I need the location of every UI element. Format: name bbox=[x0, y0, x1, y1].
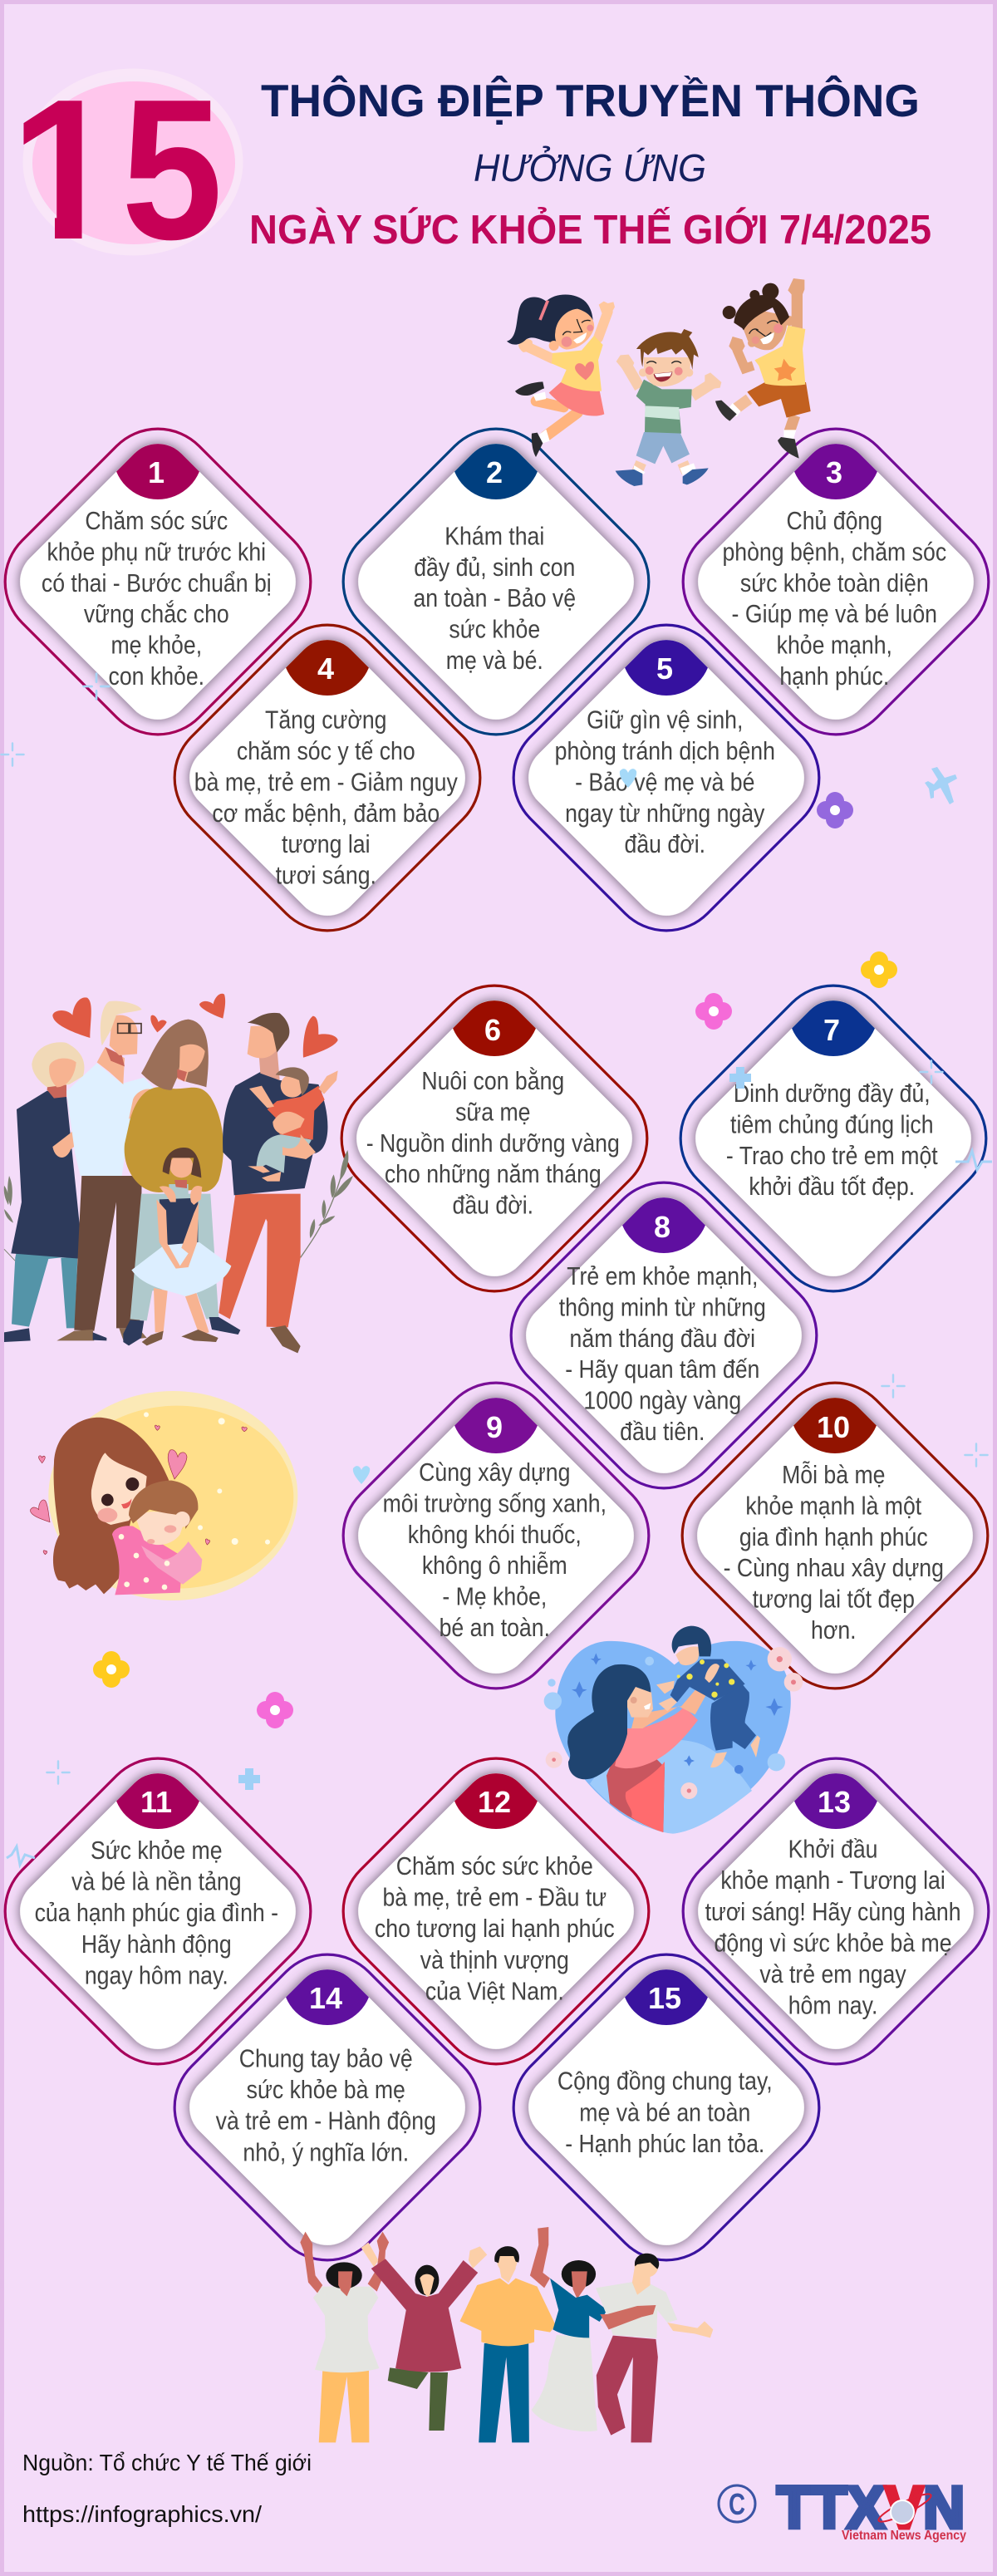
card 6 bbox=[341, 984, 648, 1293]
copyright mark: C bbox=[729, 2487, 745, 2521]
logo: TTXVN: TTXVN bbox=[777, 2475, 965, 2541]
badge 1: 1 bbox=[148, 455, 165, 489]
message 6: sữa mẹ bbox=[455, 1099, 531, 1127]
card 13 bbox=[681, 1757, 990, 2066]
badge 3: 3 bbox=[826, 455, 842, 489]
boy bbox=[616, 329, 721, 486]
badge 4: 4 bbox=[317, 651, 334, 686]
card 8 bbox=[510, 1182, 818, 1489]
message 10: gia đình hạnh phúc bbox=[739, 1523, 928, 1551]
badge 7: 7 bbox=[823, 1013, 840, 1047]
badge 2 bbox=[454, 444, 538, 499]
flowers bbox=[546, 1647, 803, 1799]
message 15: mẹ và bé an toàn bbox=[579, 2098, 750, 2127]
message 15: Cộng đồng chung tay, bbox=[557, 2067, 773, 2096]
card 10 bbox=[681, 1381, 989, 1690]
message 12: cho tương lai hạnh phúc bbox=[375, 1915, 615, 1944]
badge 5: 5 bbox=[656, 651, 673, 686]
message 2: mẹ và bé. bbox=[446, 646, 543, 676]
card 4 bbox=[173, 623, 482, 932]
card 9 bbox=[342, 1381, 650, 1690]
message 8: năm tháng đầu đời bbox=[570, 1325, 755, 1353]
hearts bbox=[52, 994, 338, 1058]
badge 15 bbox=[625, 1969, 708, 2025]
illustration: family of six bbox=[4, 994, 353, 1353]
message 3: phòng bệnh, chăm sóc bbox=[722, 538, 946, 567]
illustration: mother lifting child on blue heart bbox=[544, 1626, 803, 1834]
message 1: vững chắc cho bbox=[84, 599, 229, 629]
blue heart bbox=[555, 1641, 791, 1834]
card 5 bbox=[512, 623, 821, 932]
message 12: của Việt Nam. bbox=[425, 1978, 564, 2006]
message 11: và bé là nền tảng bbox=[71, 1868, 242, 1896]
message 3: sức khỏe toàn diện bbox=[740, 569, 929, 597]
icon: pulse lines bbox=[7, 1151, 992, 1865]
message 7: tiêm chủng đúng lịch bbox=[730, 1111, 934, 1139]
badge 9: 9 bbox=[486, 1410, 503, 1444]
message 9: bé an toàn. bbox=[440, 1614, 550, 1643]
message 6: cho những năm tháng bbox=[385, 1160, 602, 1189]
message 11: Hãy hành động bbox=[81, 1930, 232, 1959]
message 6: đầu đời. bbox=[453, 1192, 533, 1220]
message 9: môi trường sống xanh, bbox=[383, 1490, 607, 1518]
message 14: sức khỏe bà mẹ bbox=[247, 2076, 405, 2105]
message 10: - Cùng nhau xây dựng bbox=[724, 1554, 944, 1583]
message 4: Tăng cường bbox=[265, 706, 387, 735]
big number 15: 1 bbox=[10, 58, 121, 282]
message 2: sức khỏe bbox=[449, 616, 540, 644]
message 5: đầu đời. bbox=[625, 830, 705, 859]
father bbox=[219, 1194, 301, 1327]
decorative flowers and sparkles bbox=[1, 674, 992, 1865]
mother bbox=[130, 1194, 219, 1320]
badge 12 bbox=[454, 1773, 538, 1829]
message 9: không khói thuốc, bbox=[408, 1521, 582, 1549]
badge 6 bbox=[453, 1000, 536, 1056]
badge 8: 8 bbox=[654, 1210, 670, 1244]
source note: Nguồn: Tổ chức Y tế Thế giới bbox=[22, 2450, 312, 2475]
mother bbox=[607, 1728, 665, 1832]
message 1: có thai - Bước chuẩn bị bbox=[42, 569, 272, 597]
icon: airplane bbox=[925, 767, 957, 804]
leaves left and right bbox=[4, 1150, 353, 1261]
message 5: - Bảo vệ mẹ và bé bbox=[575, 769, 754, 797]
message 14: Chung tay bảo vệ bbox=[239, 2045, 413, 2073]
icon: pink flower lower bbox=[257, 1692, 293, 1728]
message 1: con khỏe. bbox=[108, 662, 204, 691]
card 3 bbox=[681, 427, 990, 736]
woman in blue and white skirt bbox=[530, 2227, 607, 2431]
card 11 bbox=[3, 1757, 312, 2066]
badge 5 bbox=[625, 640, 708, 696]
message 2: Khám thai bbox=[444, 523, 544, 551]
message 8: đầu tiên. bbox=[620, 1418, 705, 1447]
icon: small hearts bbox=[353, 769, 636, 1484]
badge 11: 11 bbox=[140, 1785, 172, 1819]
icon: pink flower bbox=[695, 993, 732, 1030]
card 2 bbox=[342, 427, 650, 736]
message 9: - Mẹ khỏe, bbox=[442, 1583, 547, 1611]
badge 6: 6 bbox=[484, 1013, 501, 1047]
message 2: đầy đủ, sinh con bbox=[414, 553, 575, 582]
card 15 bbox=[512, 1953, 821, 2262]
badge 4 bbox=[286, 640, 369, 696]
message 4: cơ mắc bệnh, đảm bảo bbox=[212, 799, 440, 828]
card 1 bbox=[3, 427, 312, 736]
badge 11 bbox=[116, 1773, 199, 1829]
message 2: an toàn - Bảo vệ bbox=[413, 584, 576, 613]
badge 12: 12 bbox=[478, 1785, 511, 1819]
message 15: - Hạnh phúc lan tỏa. bbox=[565, 2130, 764, 2158]
badge 1 bbox=[116, 444, 199, 499]
title line 3: NGÀY SỨC KHỎE THẾ GIỚI 7/4/2025 bbox=[249, 207, 931, 253]
message 12: và thịnh vượng bbox=[420, 1946, 569, 1974]
icon: yellow flower bbox=[861, 951, 897, 988]
badge 15: 15 bbox=[648, 1981, 681, 2015]
badge 13 bbox=[794, 1773, 877, 1829]
daughter bbox=[154, 1288, 209, 1335]
message 11: Sức khỏe mẹ bbox=[91, 1836, 223, 1866]
woman in maroon bbox=[361, 2242, 487, 2431]
message 4: bà mẹ, trẻ em - Giảm nguy bbox=[194, 769, 458, 797]
message 4: chăm sóc y tế cho bbox=[237, 737, 415, 766]
illustration: three jumping children bbox=[507, 278, 811, 486]
badge 10 bbox=[793, 1398, 877, 1453]
message 1: Chăm sóc sức bbox=[85, 507, 228, 536]
grandfather bbox=[74, 1176, 142, 1331]
card 12 bbox=[342, 1757, 650, 2066]
website link: https://infographics.vn/ bbox=[22, 2501, 262, 2527]
message 8: thông minh từ những bbox=[559, 1294, 766, 1322]
message 5: ngay từ những ngày bbox=[565, 799, 765, 828]
message 11: của hạnh phúc gia đình - bbox=[35, 1899, 278, 1928]
message 8: 1000 ngày vàng bbox=[583, 1387, 741, 1415]
icon: sparkles bbox=[1, 674, 988, 1784]
small flowers and hearts bbox=[144, 1412, 270, 1545]
decorative circle behind 15 bbox=[27, 72, 239, 252]
message 13: hôm nay. bbox=[788, 1992, 877, 2020]
message 9: không ô nhiễm bbox=[422, 1551, 567, 1581]
yellow moon bbox=[48, 1391, 297, 1600]
dress dots bbox=[119, 1534, 169, 1590]
message 6: - Nguồn dinh dưỡng vàng bbox=[366, 1129, 620, 1158]
icon: purple flower bbox=[817, 792, 853, 828]
mother pink dress bbox=[112, 1526, 183, 1595]
badge 9 bbox=[454, 1398, 538, 1453]
message 13: và trẻ em ngay bbox=[759, 1960, 906, 1989]
message 3: - Giúp mẹ và bé luôn bbox=[732, 600, 937, 629]
message 3: hạnh phúc. bbox=[779, 662, 889, 691]
message 13: khỏe mạnh - Tương lai bbox=[720, 1866, 945, 1895]
badge 13: 13 bbox=[818, 1785, 851, 1819]
girl bbox=[507, 294, 615, 457]
badge 14: 14 bbox=[309, 1981, 342, 2015]
message 8: - Hãy quan tâm đến bbox=[565, 1355, 759, 1384]
icon: plus signs bbox=[238, 1067, 751, 1790]
message 1: mẹ khỏe, bbox=[111, 632, 202, 660]
card 7 bbox=[680, 984, 987, 1293]
message 10: tương lai tốt đẹp bbox=[753, 1585, 915, 1614]
baby bbox=[141, 1541, 202, 1585]
message 13: động vì sức khỏe bà mẹ bbox=[715, 1930, 952, 1958]
illustration: mother hugging baby on yellow moon bbox=[31, 1391, 297, 1600]
big number 15: 5 bbox=[121, 58, 223, 282]
badge 3 bbox=[794, 444, 877, 499]
woman in white bbox=[300, 2232, 389, 2442]
child held by father bbox=[256, 1134, 312, 1173]
message 4: tương lai bbox=[282, 830, 371, 859]
message 3: khỏe mạnh, bbox=[777, 632, 892, 660]
message 13: Khởi đầu bbox=[788, 1836, 878, 1864]
sparkles and bubbles bbox=[572, 1653, 783, 1774]
illustration: group of five friends bbox=[300, 2227, 713, 2442]
title line 1: THÔNG ĐIỆP TRUYỀN THÔNG bbox=[261, 75, 920, 126]
card 14 bbox=[173, 1953, 482, 2262]
message 1: khỏe phụ nữ trước khi bbox=[47, 538, 266, 567]
message 10: khỏe mạnh là một bbox=[745, 1492, 921, 1521]
message 10: hơn. bbox=[811, 1616, 857, 1645]
mother hair bbox=[53, 1418, 169, 1594]
logo: TTXVN: Vietnam News Agency bbox=[842, 2529, 966, 2543]
badge 10: 10 bbox=[817, 1410, 850, 1444]
message 5: Giữ gìn vệ sinh, bbox=[587, 706, 743, 735]
message 12: Chăm sóc sức khỏe bbox=[396, 1852, 593, 1881]
message 8: Trẻ em khỏe mạnh, bbox=[567, 1262, 758, 1291]
lifted child bbox=[710, 1684, 756, 1751]
icon: yellow flower lower bbox=[93, 1651, 130, 1688]
badge 14 bbox=[286, 1969, 369, 2025]
message 11: ngay hôm nay. bbox=[85, 1962, 228, 1990]
message 4: tươi sáng. bbox=[276, 862, 376, 890]
message 12: bà mẹ, trẻ em - Đầu tư bbox=[382, 1884, 607, 1912]
message 14: và trẻ em - Hành động bbox=[216, 2107, 436, 2136]
message 9: Cùng xây dựng bbox=[419, 1458, 570, 1487]
badge 8 bbox=[622, 1197, 705, 1253]
message 7: - Trao cho trẻ em một bbox=[726, 1142, 938, 1170]
badge 7 bbox=[792, 1000, 875, 1056]
message 5: phòng tránh dịch bệnh bbox=[555, 737, 775, 766]
third child bbox=[715, 278, 811, 459]
message 7: Dinh dưỡng đầy đủ, bbox=[734, 1079, 931, 1109]
man in yellow bbox=[460, 2246, 556, 2442]
badge 2: 2 bbox=[486, 455, 503, 489]
message 14: nhỏ, ý nghĩa lớn. bbox=[243, 2138, 409, 2167]
message 6: Nuôi con bằng bbox=[421, 1066, 564, 1096]
grandmother bbox=[12, 1202, 77, 1328]
man in white shirt bbox=[596, 2254, 713, 2442]
copyright mark bbox=[719, 2485, 755, 2522]
message 10: Mỗi bà mẹ bbox=[782, 1460, 886, 1490]
big number 15 bbox=[23, 101, 218, 241]
message 13: tươi sáng! Hãy cùng hành bbox=[705, 1898, 961, 1926]
title line 2: HƯỞNG ỨNG bbox=[474, 145, 706, 189]
message 7: khởi đầu tốt đẹp. bbox=[749, 1172, 915, 1202]
message 3: Chủ động bbox=[786, 507, 882, 536]
